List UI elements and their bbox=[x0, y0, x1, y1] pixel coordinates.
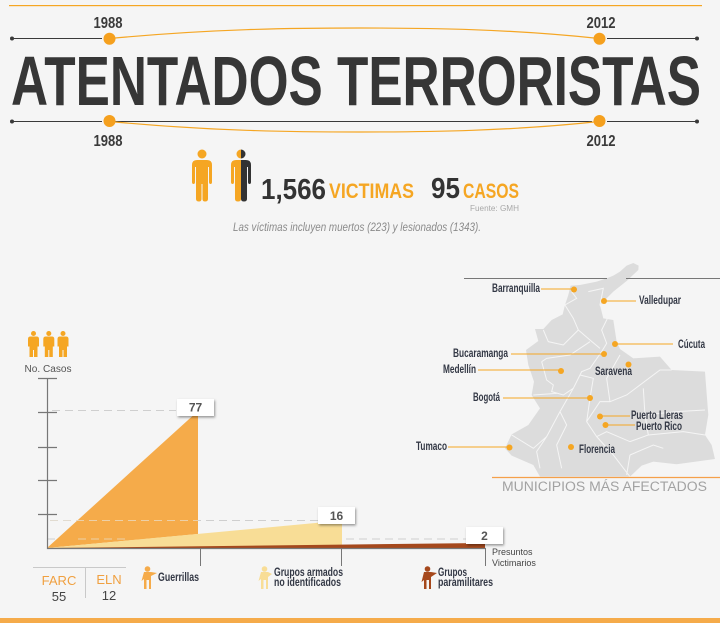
legend: grupos paramilitares bbox=[422, 566, 493, 589]
year labels: 1988 bbox=[94, 133, 123, 150]
dashed guide lines bbox=[47, 410, 466, 539]
map city labels: Puerto Rico bbox=[636, 421, 682, 433]
legend: grupos armados no identificados: Grupos armados bbox=[274, 567, 343, 579]
map of Colombia bbox=[505, 263, 715, 477]
map city labels bbox=[416, 283, 705, 456]
map leader lines and markers bbox=[448, 286, 673, 450]
value label 16 bbox=[318, 507, 355, 524]
year labels: 2012 bbox=[586, 133, 616, 150]
year labels: 2012 bbox=[586, 15, 616, 32]
stat: victimas: 1,566 bbox=[261, 174, 326, 206]
header timeline bbox=[9, 5, 702, 132]
axis label: No. Casos bbox=[24, 364, 72, 375]
map city labels: Puerto Lleras bbox=[631, 410, 683, 422]
area chart: casos por presuntos victimarios bbox=[38, 378, 486, 566]
value label 77: 77 bbox=[189, 400, 202, 414]
area: guerrillas bbox=[47, 411, 198, 548]
farc eln table: 12 bbox=[102, 588, 116, 603]
legend: grupos paramilitares: Grupos bbox=[438, 567, 467, 579]
map city labels: Tumaco bbox=[416, 441, 447, 453]
source: Fuente: GMH bbox=[470, 204, 519, 213]
map city labels: Valledupar bbox=[639, 295, 681, 307]
axis bbox=[38, 378, 486, 548]
value label 2: 2 bbox=[481, 529, 488, 543]
bottom bar bbox=[0, 618, 720, 623]
stat: victimas bbox=[261, 174, 414, 206]
legend: grupos paramilitares: paramilitares bbox=[438, 577, 493, 589]
value label 2 bbox=[466, 527, 503, 544]
map city labels: Barranquilla bbox=[492, 283, 540, 295]
icon: person half orange half dark bbox=[231, 150, 251, 202]
map city labels: Florencia bbox=[579, 444, 615, 456]
map city labels: Saravena bbox=[595, 366, 632, 378]
legend: grupos armados no identificados: no identificados bbox=[274, 577, 341, 589]
x axis title: Victimarios bbox=[492, 558, 536, 568]
x axis title: Presuntos bbox=[492, 547, 533, 557]
map city labels: Medellín bbox=[443, 364, 476, 376]
map city labels: Cúcuta bbox=[678, 339, 705, 351]
value label 77 bbox=[177, 399, 214, 416]
icon: three people bbox=[28, 331, 68, 357]
area: grupos armados no identificados bbox=[47, 520, 342, 548]
farc eln table: FARC bbox=[42, 573, 76, 588]
decorative map rules bbox=[464, 278, 720, 478]
stat: casos bbox=[431, 173, 519, 205]
map city labels: Bucaramanga bbox=[453, 348, 508, 360]
icon: person orange bbox=[192, 150, 212, 202]
legend: guerrillas bbox=[142, 566, 199, 589]
value label 16: 16 bbox=[330, 509, 343, 523]
year labels: 1988 bbox=[94, 15, 123, 32]
legend: grupos armados no identificados bbox=[258, 566, 343, 589]
farc eln table: ELN bbox=[96, 572, 122, 587]
area: grupos paramilitares bbox=[47, 543, 485, 548]
map city labels: Bogotá bbox=[473, 392, 500, 404]
x axis title bbox=[492, 547, 536, 568]
stat: casos: CASOS bbox=[463, 180, 519, 203]
map caption: MUNICIPIOS MÁS AFECTADOS bbox=[502, 479, 707, 494]
year labels bbox=[94, 15, 616, 150]
stat: victimas: VICTIMAS bbox=[329, 180, 414, 203]
stat: casos: 95 bbox=[431, 173, 460, 205]
farc eln table: 55 bbox=[52, 589, 66, 604]
legend: guerrillas: Guerrillas bbox=[158, 572, 199, 584]
farc eln table bbox=[33, 568, 126, 604]
subtitle note: Las víctimas incluyen muertos (223) y lesionados (1343). bbox=[233, 222, 481, 234]
